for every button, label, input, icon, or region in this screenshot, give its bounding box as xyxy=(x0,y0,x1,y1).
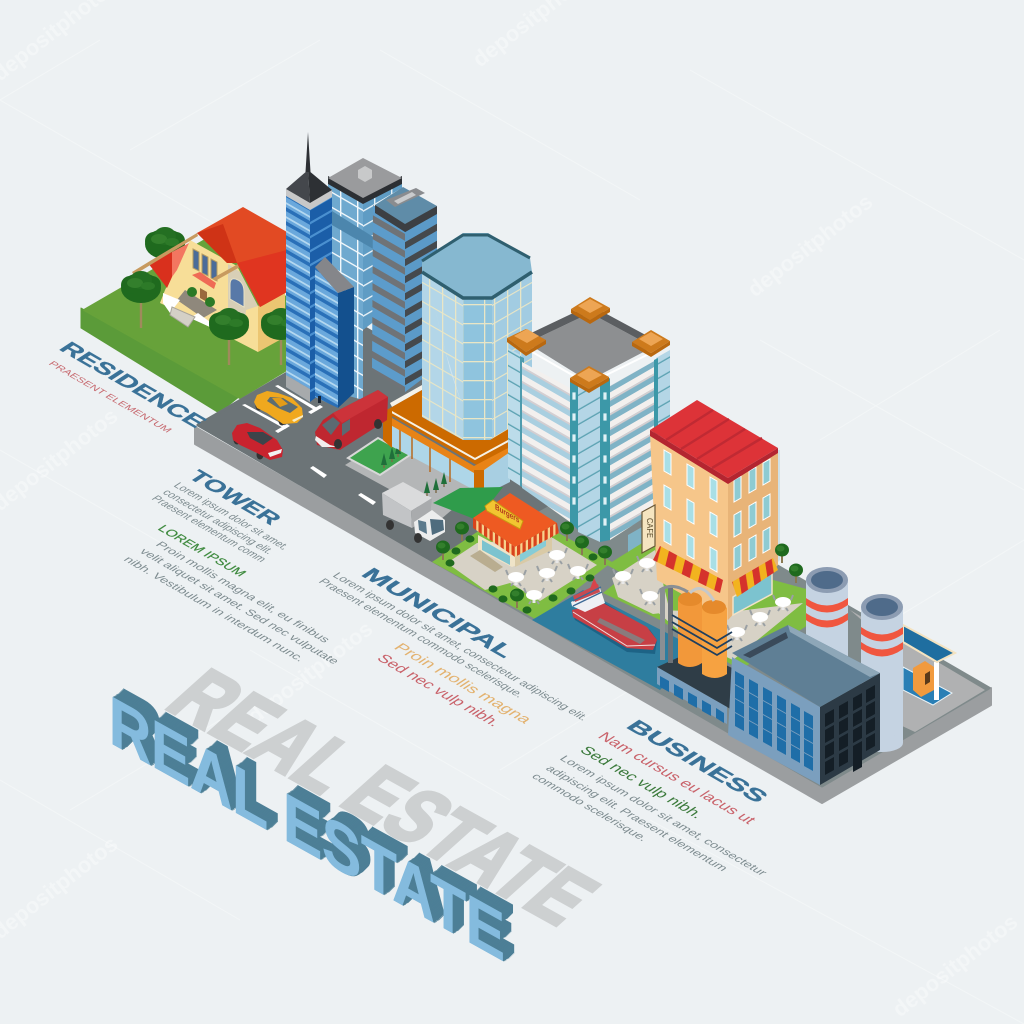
orange base xyxy=(390,390,510,467)
right awning xyxy=(732,558,778,597)
restaurant sign: Burgers xyxy=(495,502,520,525)
label: municipal: Proin mollis magna xyxy=(390,641,536,726)
left pillar xyxy=(508,348,522,487)
house xyxy=(121,207,301,365)
factory xyxy=(657,586,880,785)
city slab xyxy=(195,328,991,803)
label: residence: PRAESENT ELEMENTUM xyxy=(46,359,175,434)
railings xyxy=(163,293,180,313)
tower B small xyxy=(315,257,354,408)
right plaza xyxy=(603,535,810,670)
dark green lawn xyxy=(433,487,503,520)
main building walls xyxy=(728,657,820,785)
water xyxy=(532,590,700,690)
label: business xyxy=(528,716,774,878)
chimney back xyxy=(806,567,848,660)
label: business: commodo scelerisque. xyxy=(528,772,651,843)
yellow car xyxy=(254,391,303,426)
apartment block xyxy=(507,297,670,556)
plaza trees and bushes xyxy=(436,522,612,614)
tiled roof xyxy=(650,400,778,478)
title 3D: REAL ESTATE xyxy=(111,681,507,976)
red-roof hotel xyxy=(650,400,803,620)
label: business: BUSINESS xyxy=(621,716,774,806)
pavement and left planter xyxy=(345,438,475,520)
ship cabin xyxy=(571,588,605,612)
glass tower xyxy=(383,233,532,495)
front windows xyxy=(735,671,813,771)
label: tower: Praesent elementum comm xyxy=(148,494,269,564)
shop window xyxy=(733,572,772,615)
label: business: Nam cursus eu lacus ut xyxy=(594,730,760,827)
pipes xyxy=(660,588,665,660)
tree behind house xyxy=(145,227,185,284)
tree front xyxy=(209,308,249,365)
potted bushes xyxy=(187,287,197,297)
left windows xyxy=(664,450,717,572)
title 3D: REAL ESTATE xyxy=(115,679,511,974)
label: tower: velit aliquet sit amet. Sed nec vulputate xyxy=(136,547,342,666)
label: tower: LOREM IPSUM xyxy=(154,523,249,579)
residence lawn xyxy=(81,240,295,413)
cafe sign: CAFE xyxy=(645,518,654,538)
label: tower xyxy=(120,466,342,666)
road markings xyxy=(242,385,376,505)
patio xyxy=(177,290,217,318)
pillar windows xyxy=(572,392,607,526)
watermark: depositphotos xyxy=(743,189,877,302)
title 3D: REAL ESTATE xyxy=(112,681,508,976)
watermark: depositphotos xyxy=(888,909,1022,1022)
right windows xyxy=(734,459,770,570)
label: municipal: Sed nec vulp nibh. xyxy=(373,652,505,729)
concrete pad xyxy=(850,610,985,732)
low wing xyxy=(657,650,732,710)
lawn trees xyxy=(424,472,447,496)
left plaza xyxy=(432,522,612,620)
label: municipal: Lorem ipsum dolor sit amet, consectetur adipiscing elit. xyxy=(329,571,591,723)
left balconies xyxy=(522,362,570,522)
plaza tables xyxy=(506,548,793,641)
tower D stripes xyxy=(372,187,437,392)
roof corner blocks xyxy=(507,329,546,356)
label: business: adipiscing elit. Praesent elementum xyxy=(542,764,730,873)
trees right of hotel xyxy=(775,544,803,583)
steps xyxy=(170,307,195,327)
red van xyxy=(315,390,388,450)
label: tower: consectetur adipiscing elit. xyxy=(159,488,276,556)
pump xyxy=(913,661,934,697)
red car xyxy=(232,423,283,460)
label: municipal: Praesent elementum commodo scelerisque. xyxy=(315,577,527,700)
tower A with spire xyxy=(286,132,332,402)
dark side windows xyxy=(825,685,875,775)
title 3D: REAL ESTATE xyxy=(117,677,513,972)
label: municipal: MUNICIPAL xyxy=(356,564,521,661)
tree right xyxy=(261,308,301,365)
label: tower: Lorem ipsum dolor sit amet, xyxy=(170,481,292,552)
watermark: depositphotos xyxy=(243,616,377,729)
title 3D: REAL ESTATE xyxy=(120,674,516,969)
house walls xyxy=(258,290,285,352)
door xyxy=(200,288,207,302)
title 3D: REAL ESTATE xyxy=(113,680,509,975)
title 3D: REAL ESTATE xyxy=(116,678,512,973)
title 3D: REAL ESTATE xyxy=(114,679,510,974)
arched window xyxy=(230,279,244,307)
main roof xyxy=(197,207,287,307)
upper windows xyxy=(193,249,217,281)
label: residence: RESIDENCE xyxy=(54,338,212,431)
right balconies xyxy=(610,360,656,540)
door xyxy=(628,527,642,556)
label: tower: TOWER xyxy=(183,466,287,528)
restaurant roof xyxy=(473,493,557,547)
awning xyxy=(192,272,216,289)
title 3D: REAL ESTATE xyxy=(119,675,515,970)
right pillar xyxy=(656,350,670,450)
orange base back rail xyxy=(390,385,422,407)
gas station xyxy=(903,625,955,705)
truck xyxy=(382,482,445,543)
title 3D: REAL ESTATE xyxy=(109,682,505,977)
label: tower: nibh. Vestibulum in interdum nunc. xyxy=(120,555,307,664)
left awning xyxy=(653,546,723,593)
chimney front xyxy=(861,594,903,752)
tree left xyxy=(121,271,161,328)
title 3D: REAL ESTATE xyxy=(110,682,506,977)
tower C glass xyxy=(328,158,402,400)
label: business: Lorem ipsum dolor sit amet, consectetur xyxy=(556,754,770,878)
title shadow: REAL ESTATE xyxy=(149,656,616,939)
label: business: Sed nec vulp nibh. xyxy=(576,744,708,821)
title 3D: REAL ESTATE xyxy=(118,676,514,971)
main roof xyxy=(732,625,880,707)
label: tower: Proin mollis magna elit, eu finibus xyxy=(152,540,333,645)
canopy xyxy=(903,625,955,662)
orange tanks xyxy=(678,594,702,667)
cafe sign xyxy=(642,505,655,553)
centre pillar xyxy=(570,378,578,530)
roof xyxy=(527,313,653,381)
canopy pillar xyxy=(934,662,939,700)
ship xyxy=(571,578,657,654)
gable roof xyxy=(148,252,172,288)
restaurant xyxy=(470,493,559,572)
